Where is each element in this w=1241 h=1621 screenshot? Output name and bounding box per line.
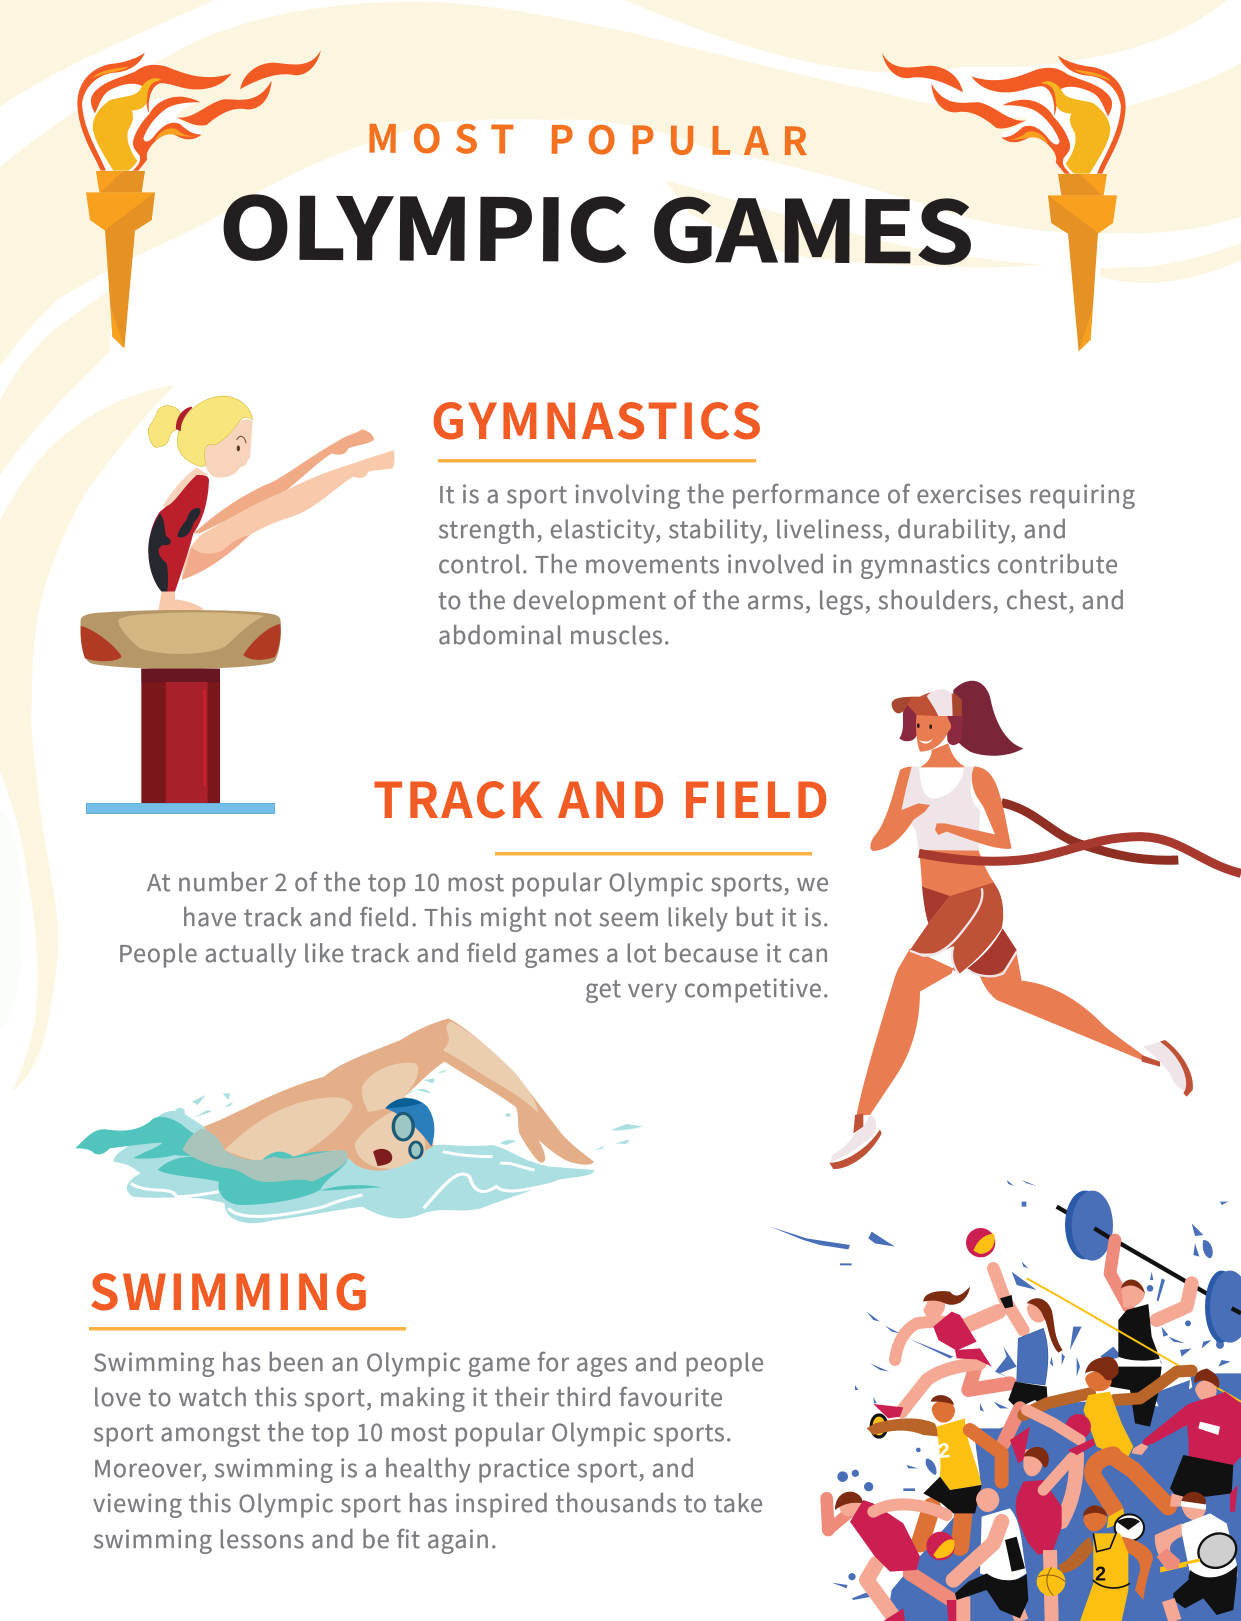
tennis player xyxy=(1155,1492,1241,1621)
text block: track and field: get very competitive. xyxy=(585,970,829,1004)
bald player xyxy=(953,1488,1028,1621)
sprinter in red xyxy=(827,1492,958,1621)
background: faint green glow xyxy=(0,812,23,1028)
man in pink xyxy=(1132,1368,1241,1512)
text block: track and field: have track and field. This might not seem likely but it is. xyxy=(182,899,829,933)
text block: gymnastics: to the development of the arms, legs, shoulders, chest, and xyxy=(438,582,1125,616)
heading: track and field: TRACK AND FIELD xyxy=(373,762,829,833)
icon: right torch xyxy=(882,53,1126,351)
background: cream waves xyxy=(0,0,1241,1091)
heading: swimming: SWIMMING xyxy=(89,1254,369,1325)
text block: track and field: People actually like track and field games a lot because it can xyxy=(118,935,829,969)
divider: swimming xyxy=(89,1327,406,1330)
illustration: swimmer xyxy=(75,1018,644,1223)
illustration: group of athletes xyxy=(770,1180,1241,1621)
text block: track and field: At number 2 of the top 10 most popular Olympic sports, we xyxy=(147,864,829,898)
title: olympic games: OLYMPIC GAMES xyxy=(219,161,975,288)
text block: gymnastics: It is a sport involving the performance of exercises requiring xyxy=(438,476,1135,510)
basketball player xyxy=(1037,1505,1153,1621)
illustration: gymnast on vault xyxy=(81,396,395,814)
text block: gymnastics: strength, elasticity, stability, liveliness, durability, and xyxy=(438,511,1067,545)
javelin xyxy=(1027,1278,1241,1402)
text block: swimming: love to watch this sport, making it their third favourite xyxy=(93,1379,723,1413)
illustration: runner xyxy=(829,681,1241,1169)
hurdler xyxy=(873,1287,1010,1418)
discus jersey number: 2 xyxy=(937,1439,951,1463)
text block: track and field xyxy=(118,864,829,1004)
weightlifter xyxy=(1057,1191,1241,1427)
divider: gymnastics xyxy=(438,459,756,462)
text block: swimming: Moreover, swimming is a healthy practice sport, and xyxy=(93,1450,695,1484)
text block: gymnastics: abdominal muscles. xyxy=(438,617,670,651)
blue paint splash xyxy=(770,1180,1241,1621)
discus thrower xyxy=(867,1395,1002,1547)
title: most popular: MOST POPULAR xyxy=(366,109,808,167)
icon: left torch xyxy=(77,50,321,348)
volleyball player xyxy=(993,1268,1063,1443)
text block: gymnastics xyxy=(438,476,1135,651)
basketball player: 2 xyxy=(1095,1564,1106,1586)
text block: swimming xyxy=(93,1344,764,1555)
text block: swimming: Swimming has been an Olympic game for ages and people xyxy=(93,1344,764,1378)
ribbon gymnast xyxy=(1010,1410,1095,1621)
text block: swimming: viewing this Olympic sport has inspired thousands to take xyxy=(93,1485,763,1519)
text block: gymnastics: control. The movements involved in gymnastics contribute xyxy=(438,546,1118,580)
text block: swimming: sport amongst the top 10 most popular Olympic sports. xyxy=(93,1414,732,1448)
divider: track and field xyxy=(495,852,812,856)
javelin thrower xyxy=(1023,1357,1192,1528)
ball xyxy=(926,1532,955,1560)
heading: gymnastics: GYMNASTICS xyxy=(431,383,762,454)
volleyball xyxy=(966,1228,995,1257)
text block: swimming: swimming lessons and be fit again. xyxy=(93,1521,497,1555)
